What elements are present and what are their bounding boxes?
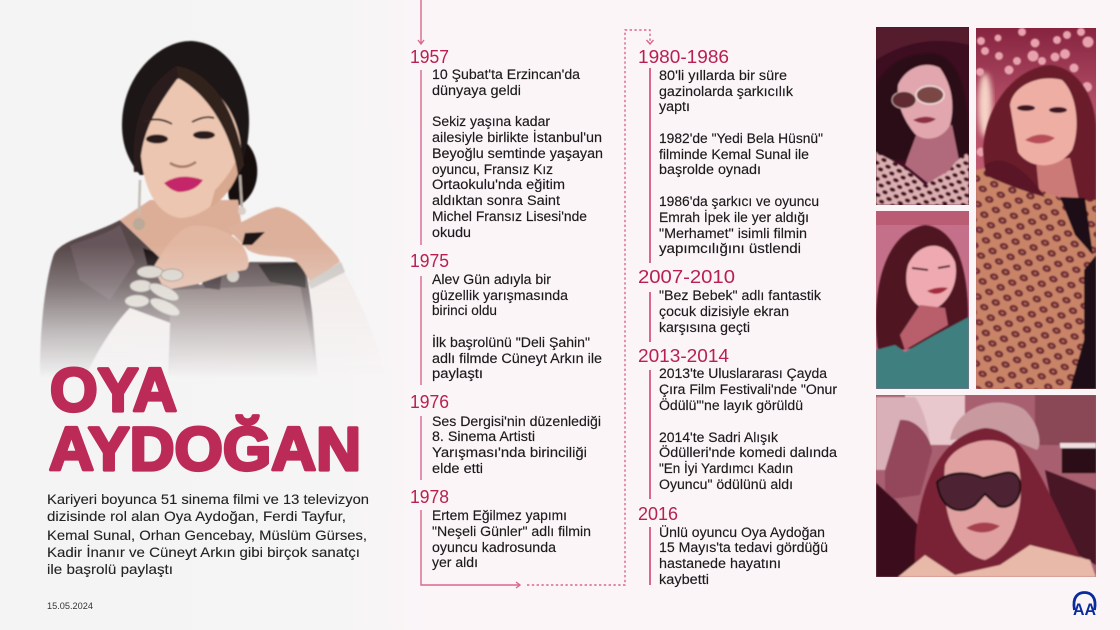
bracelet right: [308, 262, 345, 289]
timeline: 2016: 2016: [638, 503, 678, 524]
timeline: 1957: 1957: [410, 46, 449, 67]
timeline: 1976: Yarışması'nda birinciliği: [432, 445, 587, 460]
timeline: 1957: dünyaya geldi: [432, 83, 521, 98]
timeline: 1975: [410, 250, 602, 381]
bun: [228, 138, 257, 206]
fringe: [134, 66, 178, 172]
title: [49, 356, 361, 483]
timeline: 1975: paylaştı: [432, 366, 483, 381]
timeline: 1975: 1975: [410, 250, 449, 271]
timeline: 1976: Ses Dergisi'nin düzenlediği: [432, 414, 601, 429]
bracelets left: [125, 266, 183, 319]
intro paragraph: dizisinde rol alan Oya Aydoğan, Ferdi Tayfur,: [47, 508, 346, 524]
timeline: 2016: 15 Mayıs'ta tedavi gördüğü: [659, 540, 828, 555]
nose: [170, 162, 196, 167]
timeline: 1957: 10 Şubat'ta Erzincan'da: [432, 67, 581, 82]
timeline: 1978: 1978: [410, 486, 449, 507]
timeline: 1976: [410, 391, 601, 476]
timeline: 1980-1986: 1986'da şarkıcı ve oyuncu: [659, 194, 819, 209]
timeline: 1975: İlk başrolünü "Deli Şahin": [432, 335, 590, 350]
timeline: 1957: okudu: [432, 225, 471, 240]
timeline: 1957: Ortaokulu'nda eğitim: [432, 177, 565, 192]
photo: sunglasses and leopard blouse: [876, 27, 969, 205]
timeline: 1980-1986: Emrah İpek ile yer aldığı: [659, 210, 809, 225]
timeline: 1976: elde etti: [432, 461, 483, 476]
timeline: 1957: Beyoğlu semtinde yaşayan: [432, 146, 603, 161]
timeline: 1978: [410, 486, 591, 570]
timeline: 2016: [638, 503, 828, 587]
timeline: 1978: yer aldı: [432, 555, 478, 570]
timeline: 1975: adlı filmde Cüneyt Arkın ile: [432, 351, 602, 366]
hair: [122, 41, 249, 175]
timeline: 2016: kaybetti: [659, 572, 709, 587]
timeline: 1980-1986: yaptı: [659, 99, 690, 114]
timeline: 1980-1986: [638, 46, 823, 256]
intro paragraph: Kariyeri boyunca 51 sinema filmi ve 13 televizyon: [47, 491, 369, 507]
timeline: 1980-1986: 1982'de "Yedi Bela Hüsnü": [659, 131, 823, 146]
timeline: 2013-2014: "En İyi Yardımcı Kadın: [659, 461, 793, 476]
left hand: [153, 226, 249, 290]
lace: [142, 248, 160, 266]
earrings: [139, 180, 140, 215]
timeline: 1978: "Neşeli Günler" adlı filmin: [432, 524, 591, 539]
timeline: 2013-2014: Oyuncu" ödülünü aldı: [659, 477, 793, 492]
timeline: 1980-1986: gazinolarda şarkıcılık: [659, 84, 793, 99]
logo: Anadolu Agency: [1073, 592, 1096, 619]
timeline: 1980-1986: 1980-1986: [638, 46, 729, 67]
timeline: 1980-1986: 80'li yıllarda bir süre: [659, 68, 787, 83]
timeline: 1975: birinci oldu: [432, 303, 497, 318]
timeline: 2013-2014: 2014'te Sadri Alışık: [659, 430, 778, 445]
timeline: 2007-2010: "Bez Bebek" adlı fantastik: [659, 288, 821, 303]
timeline: 2007-2010: çocuk dizisiyle ekran: [659, 304, 789, 319]
timeline: 1980-1986: filminde Kemal Sunal ile: [659, 147, 809, 162]
portrait of Oya Aydoğan: [40, 41, 386, 378]
timeline: 1976: 1976: [410, 391, 449, 412]
photo: smiling woman in teal top: [876, 211, 969, 389]
timeline: 2016: hastanede hayatını: [659, 556, 781, 571]
blouse: [40, 220, 322, 378]
face: [140, 78, 241, 218]
timeline: 2007-2010: karşısına geçti: [659, 320, 750, 335]
timeline: 1957: Sekiz yaşına kadar: [432, 114, 551, 129]
neck and chest: [120, 200, 242, 262]
timeline: 2007-2010: 2007-2010: [638, 266, 735, 287]
title: OYA: [50, 356, 177, 424]
lips: [164, 177, 203, 192]
timeline: 2013-2014: Çıra Film Festivali'nde "Onur: [659, 382, 838, 397]
timeline: 1978: oyuncu kadrosunda: [432, 540, 557, 555]
timeline: 1976: 8. Sinema Artisti: [432, 429, 535, 444]
timeline: 1978: Ertem Eğilmez yapımı: [432, 508, 567, 523]
timeline: 2013-2014: 2013-2014: [638, 345, 729, 366]
timeline connector lines and arrows: [418, 0, 654, 588]
timeline: 2016: Ünlü oyuncu Oya Aydoğan: [659, 525, 825, 540]
title: AYDOĞAN: [49, 415, 361, 483]
timeline: 2013-2014: Ödülleri'nde komedi dalında: [659, 445, 838, 460]
logo: Anadolu Agency: AA: [1073, 600, 1096, 619]
photo: leopard jacket on stage: [976, 28, 1096, 389]
pale forearms: [310, 274, 359, 370]
timeline: 1975: güzellik yarışmasında: [432, 288, 569, 303]
timeline: 1957: [410, 46, 603, 240]
right hand: [227, 207, 340, 282]
timeline: 1957: aldıktan sonra Saint: [432, 193, 560, 208]
timeline: 1975: Alev Gün adıyla bir: [432, 272, 552, 287]
timeline: 1957: oyuncu, Fransız Kız: [432, 162, 553, 177]
eyes: [146, 134, 168, 144]
intro paragraph: Kadir İnanır ve Cüneyt Arkın gibi birçok sanatçı: [47, 543, 360, 560]
intro paragraph: [47, 491, 369, 577]
timeline: 2013-2014: [638, 345, 838, 492]
intro paragraph: ile başrolü paylaştı: [47, 561, 173, 577]
date: 15.05.2024: [47, 601, 93, 611]
timeline: 1980-1986: "Merhamet" isimli filmin: [659, 226, 807, 241]
timeline: 2013-2014: 2013'te Uluslararası Çayda: [659, 366, 828, 381]
timeline: 1980-1986: yapımcılığını üstlendi: [659, 241, 801, 256]
timeline: 2007-2010: [638, 266, 821, 335]
timeline: 1980-1986: başrolde oynadı: [659, 162, 761, 177]
timeline: 1957: ailesiyle birlikte İstanbul'un: [432, 130, 602, 145]
timeline: 2013-2014: Ödülü"'ne layık görüldü: [659, 398, 803, 413]
timeline: 1957: Michel Fransız Lisesi'nde: [432, 209, 587, 224]
photo: woman with large sunglasses: [876, 395, 1096, 577]
intro paragraph: Kemal Sunal, Orhan Gencebay, Müslüm Gürses,: [47, 527, 367, 543]
